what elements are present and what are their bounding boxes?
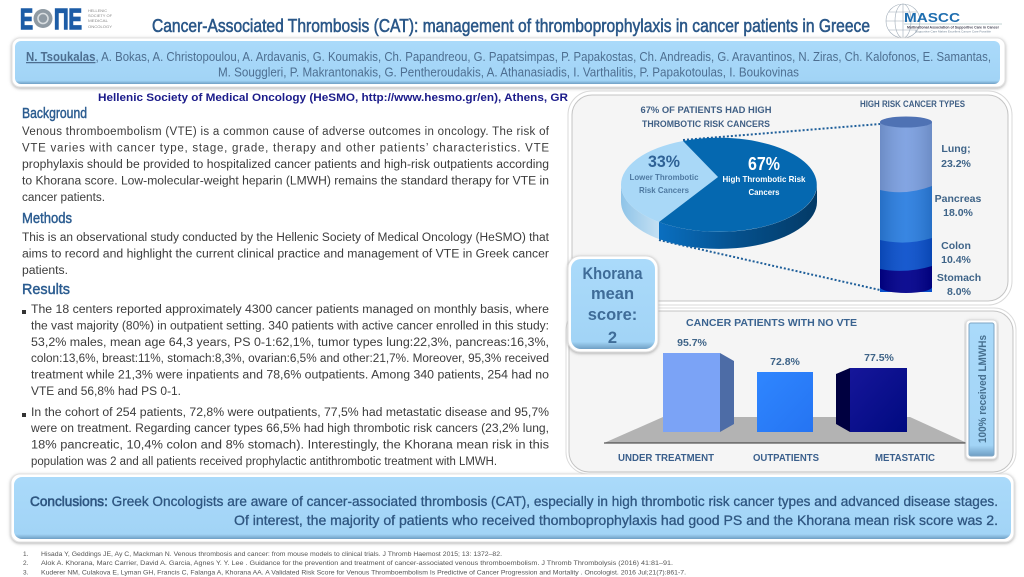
values: 95.7% (677, 337, 708, 349)
text block: background: to Khorana score. Low-molecular-weight heparin (LMWH) remains the standard therapy for VTE in (22, 176, 549, 188)
label: lower risk: 33% (648, 152, 680, 171)
logo: HeSMO: ΠΕ (54, 4, 82, 36)
callout: Khorana score: Khorana (582, 265, 643, 283)
labels: cylinder: Lung; (941, 143, 971, 155)
axis labels: UNDER TREATMENT (618, 453, 714, 464)
labels: cylinder: Stomach (937, 272, 981, 284)
callout: LMWH (966, 320, 997, 459)
labels: cylinder: 8.0% (947, 286, 972, 298)
text block: methods: patients. (22, 265, 68, 277)
bar: outpatients (757, 372, 813, 432)
labels: cylinder (935, 143, 982, 298)
text block: results: The 18 centers reported approximately 4300 cancer patients managed on monthly basis, where (31, 304, 549, 316)
dotted connectors (659, 124, 880, 290)
labels: cylinder: 23.2% (941, 158, 972, 170)
panel: conclusions (11, 474, 1014, 542)
label: high risk: High Thrombotic Risk (722, 174, 806, 184)
logo: HeSMO: MEDICAL (88, 18, 109, 23)
panel: authors (12, 38, 1005, 87)
callout: Khorana score: mean (591, 285, 634, 303)
bar: metastatic (836, 368, 907, 432)
heading: pie: THROMBOTIC RISK CANCERS (642, 119, 770, 129)
label: high risk: Cancers (748, 187, 780, 197)
title: Cancer-Associated Thrombosis (CAT): management of thromboprophylaxis in cancer patients in Greece (152, 16, 870, 36)
panel: no VTE (566, 308, 1016, 474)
panel: thrombotic risk (568, 91, 1012, 305)
panel: conclusions: Conclusions: Greek Oncologists are aware of cancer-associated thrombosis (CAT), especially in high thrombotic risk cancer types and advanced disease stages. (30, 493, 998, 509)
axis labels: OUTPATIENTS (753, 453, 819, 464)
text block: background: prophylaxis should be provided to hospitalized cancer patients and high-risk outpatients according (22, 159, 549, 171)
text block: methods: This is an observational study conducted by the Hellenic Society of Medical Oncology (HeSMO) that (22, 232, 550, 244)
heading: background: Background (22, 105, 87, 122)
text block: methods (22, 210, 550, 277)
text block: background: Venous thromboembolism (VTE) is a common cause of adverse outcomes in oncology. The risk of (22, 126, 550, 138)
label: high risk (722, 154, 806, 197)
text block: background (22, 105, 550, 204)
text block: results: population was 2 and all patients received prophylactic antithrombotic treatment with LMWH. (31, 456, 497, 468)
text block: methods: aims to record and highlight the current clinical practice and management of VTE in Greek cancer (22, 248, 549, 260)
text block: results: In the cohort of 254 patients, 72,8% were outpatients, 77,5% had metastatic disease and 95,7% (31, 407, 549, 419)
logo: MASCC: Supportive Care Makes Excellent Cancer Care Possible (915, 30, 991, 34)
logo: MASCC (886, 4, 1002, 38)
heading: results: Results (22, 281, 70, 298)
axis labels (618, 453, 935, 464)
bar: under treatment (663, 353, 734, 432)
text block: background: cancer patients. (22, 192, 105, 204)
callout: Khorana score: 2 (608, 329, 617, 347)
text block: results: 53,2% males, mean age 64,3 years, PS 0-1:62,1%, tumor types lung:22,3%, pancreas:16,3%, (31, 337, 549, 349)
label: high risk: 67% (748, 154, 780, 174)
text block: results: were on treatment. Regarding cancer types 66,5% had high thrombotic risk cancers (23,2% lung, (30, 423, 549, 435)
heading: high risk types: HIGH RISK CANCER TYPES (860, 99, 965, 109)
references (23, 551, 686, 576)
references: 1. (23, 551, 29, 558)
cylinder chart (880, 116, 932, 293)
heading: bar chart: CANCER PATIENTS WITH NO VTE (686, 317, 857, 329)
logo: HeSMO: HELLENIC (88, 8, 107, 13)
panel: authors: M. Souggleri, P. Makrantonakis, G. Pentheroudakis, A. Athanasiadis, I. Varthalitis, P. Papakotoulas, I. Boukovinas (218, 66, 799, 80)
text block: results: colon:13,6%, breast:11%, stomach:8,3%, ovarian:6,5% and other:21,7%. Moreover, 95,3% received (31, 353, 549, 365)
logo: HeSMO: SOCIETY OF (88, 13, 113, 18)
references: Alok A. Khorana, Marc Carrier, David A. Garcia, Agnes Y. Y. Lee . Guidance for the prevention and treatment of cancer-associated venous thromboembolism. J Thromb Thrombolysis (2016) 41:81–91. (41, 560, 673, 567)
references: Hisada Y, Geddings JE, Ay C, Mackman N. Venous thrombosis and cancer: from mouse models to clinical trials. J Thromb Haemost 2015; 13: 1372–82. (41, 551, 502, 558)
logo: HeSMO: ONCOLOGY (88, 24, 112, 29)
label: lower risk: Lower Thrombotic (630, 172, 699, 182)
labels: cylinder: Pancreas (935, 193, 982, 205)
label: lower risk (630, 152, 699, 195)
logo: MASCC: MASCC (904, 10, 961, 25)
values: 72.8% (770, 356, 801, 368)
pie chart (621, 138, 817, 249)
text block: results: VTE and 56,8% had PS 0-1. (31, 386, 181, 398)
logo: HeSMO (20, 4, 113, 36)
references: 2. (23, 560, 29, 567)
logo: MASCC: Multinational Association of Supportive Care in Cancer (907, 26, 1000, 30)
text block: background: VTE varies with cancer type, stage, grade, therapy and other patients’ characteristics. VTE (22, 142, 549, 154)
heading: pie (640, 105, 772, 129)
references: 3. (23, 570, 29, 576)
bar chart (604, 337, 967, 464)
logo: HeSMO: Ε (20, 4, 33, 36)
text block: results: the vast majority (80%) in outpatient setting. 340 patients with active cancer enrolled in this study: (31, 320, 549, 332)
affiliation: Hellenic Society of Medical Oncology (HeSMO, http://www.hesmo.gr/en), Athens, GR (98, 92, 568, 104)
labels: cylinder: 10.4% (941, 254, 972, 266)
references: Kuderer NM, Culakova E, Lyman GH, Francis C, Falanga A, Khorana AA. A Validated Risk Score for Venous Thromboembolism Is Predictive of Cancer Progression and Mortality . Oncologist. 2016 Jul;21(7):861-7. (41, 570, 686, 576)
values (677, 337, 895, 368)
callout: Khorana score: score: (588, 306, 637, 324)
labels: cylinder: 18.0% (943, 207, 974, 219)
values: 77.5% (864, 352, 895, 364)
heading: pie: 67% OF PATIENTS HAD HIGH (640, 105, 772, 115)
axis labels: METASTATIC (875, 453, 935, 464)
text block: results (22, 281, 549, 468)
callout: LMWH: 100% received LMWHs (977, 335, 989, 443)
heading: methods: Methods (22, 210, 72, 227)
text block: results: treatment while 21,3% were inpatients and 78,6% outpatients. Among 340 patients, 254 had no (31, 370, 549, 382)
panel: conclusions: Of interest, the majority of patients who received thomboprophylaxis had good PS and the Khorana mean risk score was 2. (234, 512, 998, 528)
callout: Khorana score (568, 256, 658, 352)
labels: cylinder: Colon (941, 240, 971, 252)
text block: results: 18% pancreatic, 10,4% colon and 8% stomach). Interestingly, the Khorana mean risk in this (31, 440, 549, 452)
label: lower risk: Risk Cancers (639, 185, 689, 195)
